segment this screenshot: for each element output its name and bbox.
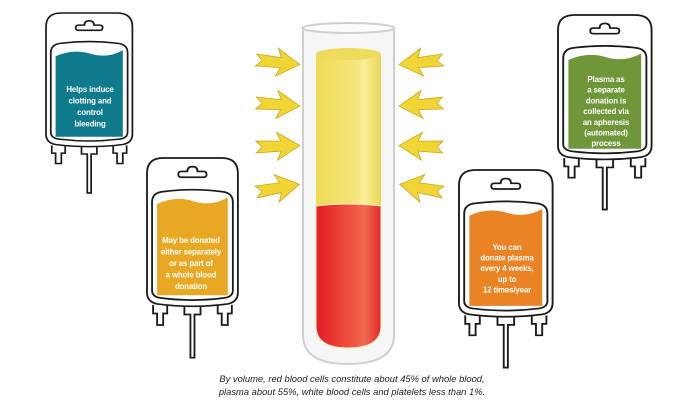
caption: plasma about 55%, white blood cells and platelets less than 1%.: [218, 386, 485, 397]
bag: teal clotting: [46, 13, 132, 193]
arrows: right, pointing left: [397, 46, 445, 206]
text: green bag: a separate: [587, 86, 626, 95]
bag: green apheresis: [558, 15, 652, 209]
text: gold bag: donation: [175, 282, 207, 291]
plasma layer: [316, 48, 381, 206]
text: teal bag: clotting and: [69, 96, 112, 106]
text: orange bag: 12 times/year: [483, 285, 531, 294]
text: gold bag: or as part of: [169, 259, 213, 268]
text: green bag: donation is: [586, 96, 627, 105]
text: teal bag: Helps induce: [66, 85, 114, 94]
text: green bag: (automated): [584, 128, 628, 138]
bag: gold whole blood: [147, 158, 238, 358]
text: green bag: process: [591, 139, 621, 148]
arrows: left, pointing right: [254, 46, 302, 206]
text: green bag: an apheresis: [583, 118, 630, 127]
text: orange bag: up to: [498, 275, 517, 284]
text: gold bag: May be donated: [162, 236, 220, 245]
text: orange bag: You can: [492, 243, 522, 252]
red blood cell layer: [316, 204, 381, 348]
text: teal bag: control: [77, 108, 103, 117]
test tube: [302, 23, 394, 364]
text: gold bag: a whole blood: [166, 270, 217, 280]
bag: orange frequency: [459, 170, 553, 368]
text: green bag: Plasma as: [587, 75, 625, 84]
text: teal bag: bleeding: [74, 120, 106, 128]
text: green bag: collected via: [583, 107, 629, 116]
text: orange bag: every 4 weeks,: [480, 264, 534, 273]
caption: By volume, red blood cells constitute about 45% of whole blood,: [219, 373, 485, 384]
text: orange bag: donate plasma: [480, 254, 534, 263]
text: gold bag: either separately: [161, 248, 222, 256]
